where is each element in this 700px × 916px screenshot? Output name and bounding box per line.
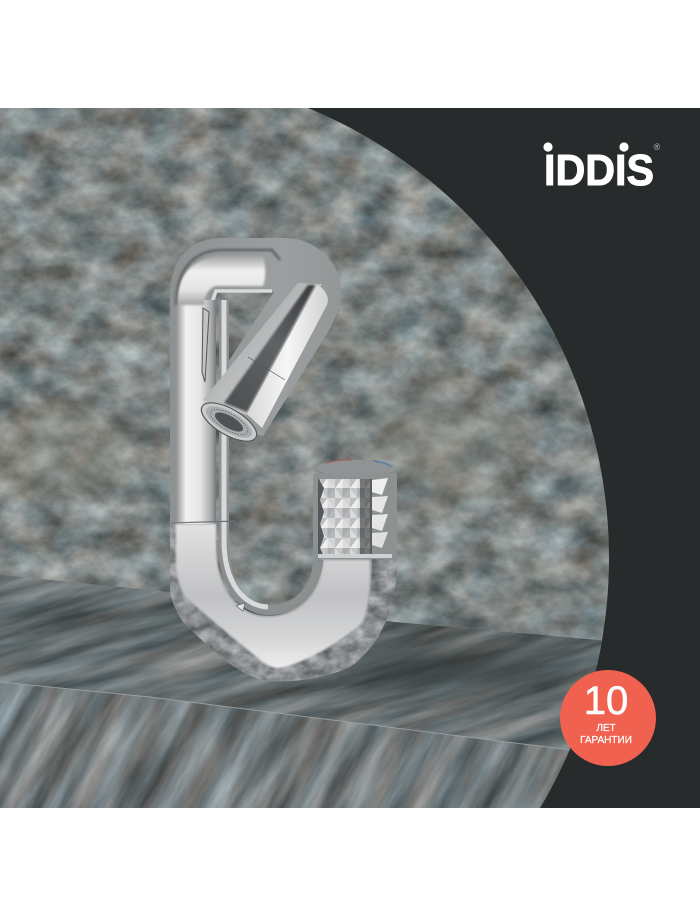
ledge front edge highlight	[0, 682, 570, 750]
logo	[543, 142, 661, 195]
top arm highlight	[176, 256, 265, 305]
spout seam	[248, 357, 285, 380]
thin pull-out pipe	[224, 300, 318, 610]
spout white reflection	[247, 285, 328, 428]
handle	[313, 460, 397, 559]
dark inner contour of the arm	[176, 250, 280, 305]
small clip on pipe	[236, 603, 245, 611]
handle top	[315, 460, 397, 476]
knurled diamonds	[320, 479, 370, 555]
cold mark	[373, 461, 391, 467]
stone semicircle scene	[0, 108, 620, 808]
lower body white surface	[176, 524, 370, 668]
aerator	[196, 395, 262, 449]
clip lever	[202, 308, 209, 382]
shadow of the faucet	[340, 648, 560, 688]
stone wall	[0, 108, 620, 668]
chrome lower texture	[170, 524, 397, 681]
dot of second i	[619, 142, 629, 152]
stone ledge front	[0, 682, 610, 808]
lever under the arm	[212, 291, 272, 302]
spout grey shoulder	[203, 283, 322, 420]
seam on left tube	[172, 521, 236, 523]
hot mark	[325, 460, 352, 463]
years number: 10	[584, 679, 628, 723]
wordmark: IDDIS	[544, 146, 654, 195]
faucet chrome silhouette	[170, 238, 397, 681]
warranty badge	[560, 670, 656, 766]
handle base	[313, 473, 397, 559]
registered mark: ®	[654, 142, 661, 152]
knurl left teeth	[318, 478, 324, 556]
glass inner U	[218, 540, 322, 613]
stone ledge top	[0, 575, 610, 808]
infographic canvas	[0, 108, 700, 808]
knurl dark shade	[360, 479, 372, 555]
left tube highlight	[176, 300, 216, 524]
handle base ring	[318, 554, 392, 558]
spout dark reflection	[224, 285, 315, 412]
dot of first i	[543, 142, 553, 152]
dark panel	[0, 108, 700, 808]
badge circle	[560, 670, 656, 766]
warranty label: ГАРАНТИИ	[580, 735, 632, 746]
years label: ЛЕТ	[596, 723, 616, 734]
faucet	[170, 238, 397, 681]
knurl right teeth	[372, 478, 388, 548]
